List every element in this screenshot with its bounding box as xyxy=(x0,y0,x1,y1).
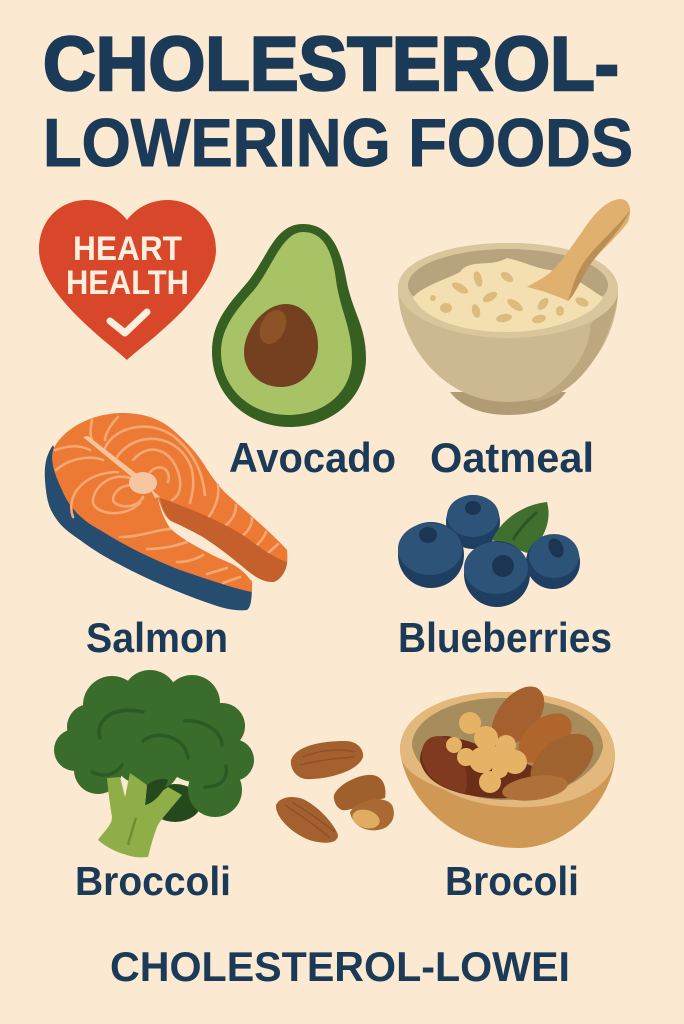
icon: blueberries xyxy=(398,495,580,607)
icon: avocado xyxy=(212,224,366,427)
label: blueberries: Blueberries xyxy=(398,614,612,661)
icon: heart health badge: HEALTH xyxy=(66,264,189,302)
footer text: CHOLESTEROL-LOWEI xyxy=(110,943,570,990)
icon: bowl of nuts xyxy=(400,677,615,848)
label: avocado: Avocado xyxy=(229,434,396,481)
icon: broccoli xyxy=(54,670,254,857)
title: CHOLESTEROL- xyxy=(43,22,619,107)
icon: heart health badge xyxy=(39,200,216,360)
label: oatmeal: Oatmeal xyxy=(430,434,594,481)
title xyxy=(43,22,633,181)
label: broccoli: Broccoli xyxy=(75,858,231,904)
icon: loose almonds xyxy=(276,741,394,843)
icon: heart health badge: HEART xyxy=(73,230,182,268)
icon: salmon steak xyxy=(45,413,287,610)
label: nuts (brocoli): Brocoli xyxy=(445,858,579,904)
title: LOWERING FOODS xyxy=(43,105,633,181)
icon: oatmeal bowl xyxy=(398,199,630,415)
label: salmon: Salmon xyxy=(86,614,228,661)
